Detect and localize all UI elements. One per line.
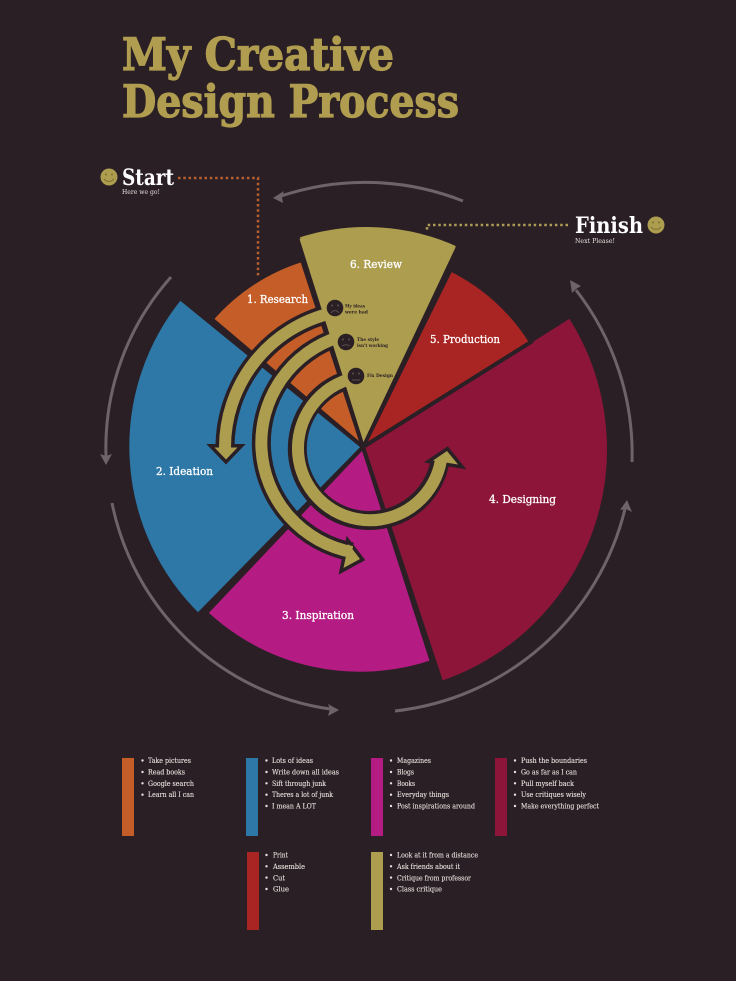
legend: designing: Go as far as I can [521, 768, 577, 776]
text: the style isn't working: isn't working [357, 343, 388, 349]
text: my ideas were bad: My ideas [345, 304, 365, 310]
legend: review [371, 852, 478, 930]
icon: worried face [338, 334, 354, 350]
arrow: ideation to inspiration [261, 337, 360, 568]
icon: sad face [327, 300, 343, 316]
legend: production: Print [273, 852, 288, 860]
legend: research [122, 757, 194, 836]
title: Design Process [122, 75, 459, 128]
legend: designing: Make everything perfect [521, 803, 599, 811]
legend: production: Glue [273, 886, 289, 894]
finish label: Next Please! [575, 237, 615, 245]
wedge fill over outlines [300, 229, 456, 442]
legend: review: Class critique [397, 886, 442, 894]
text: my ideas were bad: were bad [344, 310, 368, 316]
legend: production: Cut [273, 874, 285, 882]
arrow: research to ideation [214, 313, 332, 460]
label: review: 6. Review [350, 258, 403, 271]
arrow: outer left [100, 277, 171, 465]
start dotted connector [178, 178, 258, 282]
sector: research [212, 260, 363, 447]
panel: pie chart [127, 225, 609, 683]
legend: research: Take pictures [148, 757, 191, 765]
legend: research: Google search [148, 780, 194, 788]
legend: ideation: Write down all ideas [272, 768, 339, 776]
label: designing: 4. Designing [489, 493, 556, 506]
legend: inspiration: Everyday things [397, 791, 449, 799]
legend: review: Critique from professor [397, 874, 472, 882]
legend: inspiration: Post inspirations around [397, 803, 475, 811]
label: research: 1. Research [247, 293, 308, 306]
legend: production [247, 852, 305, 930]
legend: inspiration [371, 757, 475, 836]
label: ideation: 2. Ideation [156, 465, 213, 478]
start label: Here we go! [122, 188, 160, 196]
legend: production: Assemble [272, 863, 305, 871]
legend: ideation: Sift through junk [272, 780, 327, 788]
arrow outlines [225, 313, 440, 552]
legend: designing: Push the boundaries [521, 757, 587, 765]
finish label: Finish [575, 213, 643, 239]
arrow: outer top [273, 182, 463, 203]
legend: designing: Pull myself back [521, 780, 575, 788]
legend: research: Read books [148, 768, 185, 776]
legend: review: Ask friends about it [396, 863, 460, 871]
sector: inspiration [206, 447, 432, 674]
title [122, 28, 459, 128]
icon: neutral face [348, 368, 364, 384]
legend: ideation: I mean A LOT [272, 803, 316, 811]
legend: designing [495, 757, 599, 836]
arrow: outer bottom right [395, 500, 632, 711]
text: the style isn't working: The style [357, 337, 379, 343]
title: My Creative [122, 28, 394, 81]
start label: Start [122, 165, 175, 191]
legend: ideation [246, 757, 339, 836]
text: the style isn't working [357, 337, 388, 349]
label: inspiration: 3. Inspiration [282, 609, 354, 622]
icon: finish smiley [648, 216, 664, 234]
icon: start smiley [100, 168, 118, 186]
text: fix design: Fix Design [367, 373, 393, 379]
legend: review: Look at it from a distance [397, 852, 478, 860]
legend: designing: Use critiques wisely [521, 791, 586, 799]
sector: ideation [127, 298, 363, 615]
legend: inspiration: Books [397, 780, 415, 788]
legend: inspiration: Blogs [397, 768, 414, 776]
legend: inspiration: Magazines [397, 757, 431, 765]
arrow: outer bottom left [112, 503, 339, 716]
legend: research: Learn all I can [148, 791, 194, 799]
arrow: outer right [570, 280, 632, 462]
legend: ideation: Lots of ideas [272, 757, 313, 765]
label: production: 5. Production [430, 333, 500, 346]
legend: ideation: Theres a lot of junk [272, 791, 334, 799]
sector: production [363, 269, 531, 447]
finish dotted connector [427, 225, 568, 238]
sector: designing [363, 316, 609, 683]
sector: review [298, 225, 458, 447]
arrow: inspiration to designing [298, 380, 458, 520]
text: my ideas were bad [344, 304, 368, 316]
